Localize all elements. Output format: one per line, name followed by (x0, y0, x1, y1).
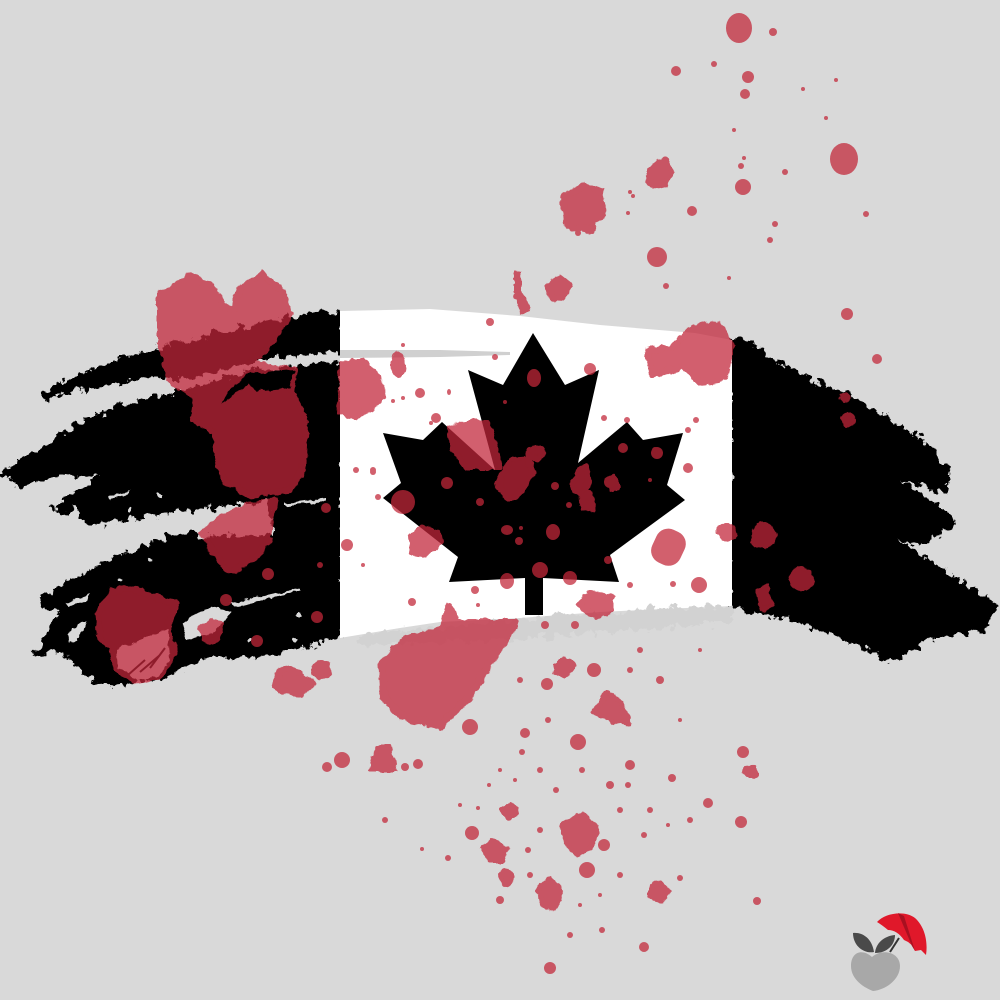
splatter: lower-left blobs (98, 500, 328, 694)
flag: dark specks in lower-left blob (128, 648, 165, 675)
splatter: top-left heart blob (160, 274, 305, 495)
flag: left black brush band (2, 311, 342, 688)
splatter: dots over leaf (220, 318, 707, 647)
splatter: bottom spray (322, 647, 761, 974)
splatter: centre white-field blobs (340, 323, 732, 617)
logo: umbrella handle (890, 938, 899, 952)
flag: grey brush line (340, 350, 510, 358)
red splatters (98, 13, 882, 974)
flag: right black brush band (730, 338, 998, 662)
flag: left band gaps (64, 490, 325, 680)
logo: umbrella canopy (877, 913, 927, 955)
flag: grey bottom fringe (360, 606, 732, 645)
splatter: top spray (514, 13, 882, 364)
logo: umbrella ribs (898, 913, 915, 951)
splatter: bottom large blob (382, 606, 515, 726)
logo: peach leaves (853, 933, 895, 953)
logo: peach with umbrella (851, 913, 927, 991)
logo: peach body (851, 952, 900, 991)
maple leaf (383, 333, 685, 615)
flag: white centre (340, 309, 732, 638)
splatter: right black-band blobs (719, 394, 854, 609)
black piece over heart blob (222, 370, 294, 405)
